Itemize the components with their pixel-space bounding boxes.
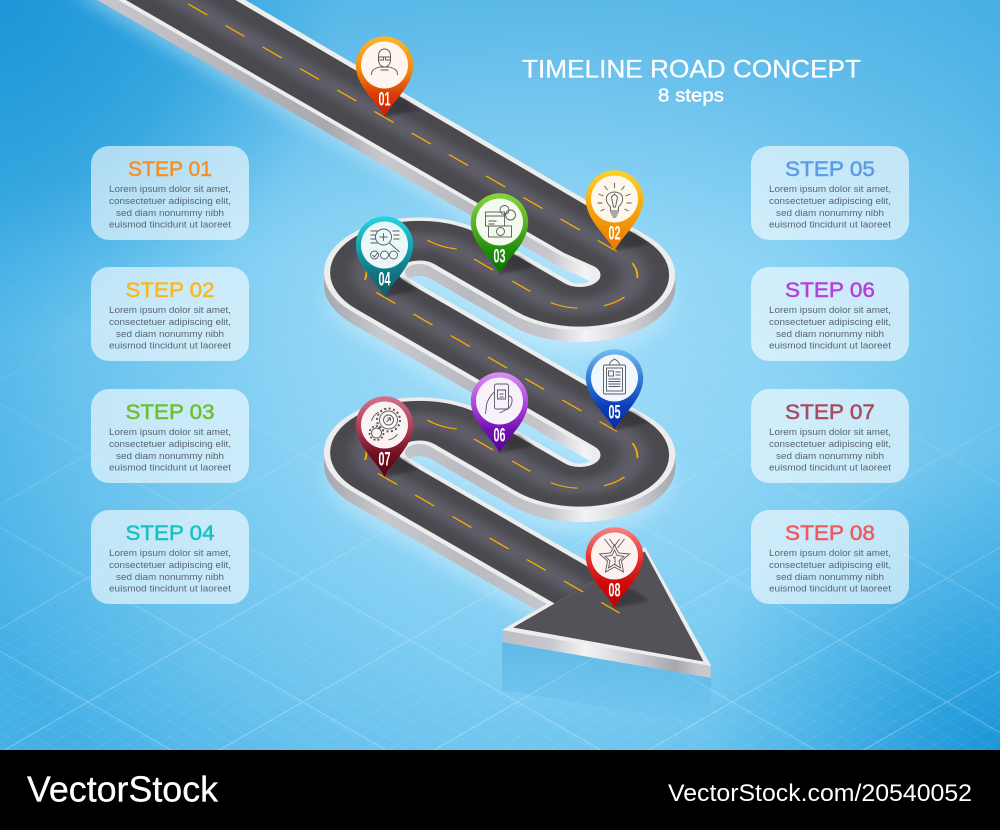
panel: step 08: STEP 08 <box>785 521 875 545</box>
panel: step 04: euismod tincidunt ut laoreet <box>109 584 231 594</box>
panel: step 01: STEP 01 <box>128 157 212 181</box>
panel: step 01: euismod tincidunt ut laoreet <box>109 220 231 230</box>
pin 08 <box>586 527 648 608</box>
panel: step 06: euismod tincidunt ut laoreet <box>769 340 891 352</box>
panel: step 02: sed diam nonummy nibh <box>116 329 224 340</box>
pin 02: 02 <box>608 224 620 244</box>
icon: gears <box>370 408 400 440</box>
panel: step 03 <box>91 389 249 483</box>
panel: step 07: STEP 07 <box>785 400 875 424</box>
panel: step 05: STEP 05 <box>785 157 875 181</box>
pin 03: 03 <box>494 246 506 268</box>
icon: magnifier with badges <box>370 229 400 259</box>
pin 05 <box>586 349 648 430</box>
pin 04 <box>356 216 418 297</box>
panel: step 08: euismod tincidunt ut laoreet <box>769 584 891 594</box>
panel: step 04: STEP 04 <box>126 521 215 545</box>
pin 07: 07 <box>378 450 390 470</box>
pin 04: 04 <box>378 270 391 290</box>
panel: step 08: sed diam nonummy nibh <box>776 572 884 583</box>
panel: step 02: consectetuer adipiscing elit, <box>109 317 231 328</box>
panel: step 05: Lorem ipsum dolor sit amet, <box>769 184 891 195</box>
footer bar <box>0 750 1000 830</box>
panel: step 04: Lorem ipsum dolor sit amet, <box>109 548 231 559</box>
pin 06: 06 <box>494 426 506 446</box>
title: TIMELINE ROAD CONCEPT <box>522 56 861 84</box>
icon: money and card <box>486 206 516 237</box>
panel: step 07: Lorem ipsum dolor sit amet, <box>769 427 891 438</box>
panel: step 05: sed diam nonummy nibh <box>776 208 884 219</box>
panel: step 07: euismod tincidunt ut laoreet <box>769 462 891 474</box>
panel: step 05 <box>751 146 909 240</box>
panel: step 03: euismod tincidunt ut laoreet <box>109 462 231 474</box>
panel: step 01: sed diam nonummy nibh <box>116 208 224 219</box>
panel: step 02: Lorem ipsum dolor sit amet, <box>109 305 231 316</box>
panel: step 07: sed diam nonummy nibh <box>776 451 884 462</box>
subtitle: 8 steps <box>658 86 724 106</box>
panel: step 01: consectetuer adipiscing elit, <box>109 196 231 207</box>
panel: step 07: consectetuer adipiscing elit, <box>769 439 891 450</box>
pin 05: 05 <box>608 402 621 424</box>
panel: step 02 <box>91 267 249 361</box>
panel: step 03: Lorem ipsum dolor sit amet, <box>109 427 231 438</box>
panel: step 04: consectetuer adipiscing elit, <box>109 560 231 571</box>
panel: step 05: consectetuer adipiscing elit, <box>769 196 891 207</box>
panel: step 07 <box>751 389 909 483</box>
road centre dashes <box>0 0 931 613</box>
panel: step 06 <box>751 267 909 361</box>
panel: step 08: consectetuer adipiscing elit, <box>769 560 891 571</box>
icon: clipboard <box>604 359 626 394</box>
panel: step 03: consectetuer adipiscing elit, <box>109 439 231 450</box>
panel: step 05: euismod tincidunt ut laoreet <box>769 220 891 230</box>
panel: step 08 <box>751 510 909 604</box>
pin 01 <box>356 36 418 117</box>
icon: light bulb <box>598 183 632 217</box>
panel: step 02: euismod tincidunt ut laoreet <box>109 340 231 352</box>
pin 07 <box>356 396 418 477</box>
panel: step 06: STEP 06 <box>785 278 875 302</box>
panel: step 04: sed diam nonummy nibh <box>116 572 224 583</box>
panel: step 06: consectetuer adipiscing elit, <box>769 317 891 328</box>
pin 06 <box>471 372 534 453</box>
pin 08: 08 <box>608 580 620 602</box>
panel: step 01: Lorem ipsum dolor sit amet, <box>109 184 231 195</box>
panel: step 08: Lorem ipsum dolor sit amet, <box>769 548 891 559</box>
panel: step 06: Lorem ipsum dolor sit amet, <box>769 305 891 316</box>
pin 01: 01 <box>378 90 391 110</box>
panel: step 03: sed diam nonummy nibh <box>116 451 224 462</box>
icon: star badge <box>600 539 630 572</box>
pin 02 <box>586 170 648 251</box>
icon: hand holding phone <box>486 384 512 414</box>
panel: step 06: sed diam nonummy nibh <box>776 329 884 340</box>
icon: person <box>372 49 398 75</box>
panel: step 03: STEP 03 <box>126 400 215 424</box>
panel: step 02: STEP 02 <box>126 278 214 302</box>
panel: step 04 <box>91 510 249 604</box>
footer url: VectorStock.com/20540052 <box>668 780 972 807</box>
panel: step 01 <box>91 146 249 240</box>
footer logo: VectorStock <box>27 768 219 810</box>
pin 03 <box>471 193 534 274</box>
